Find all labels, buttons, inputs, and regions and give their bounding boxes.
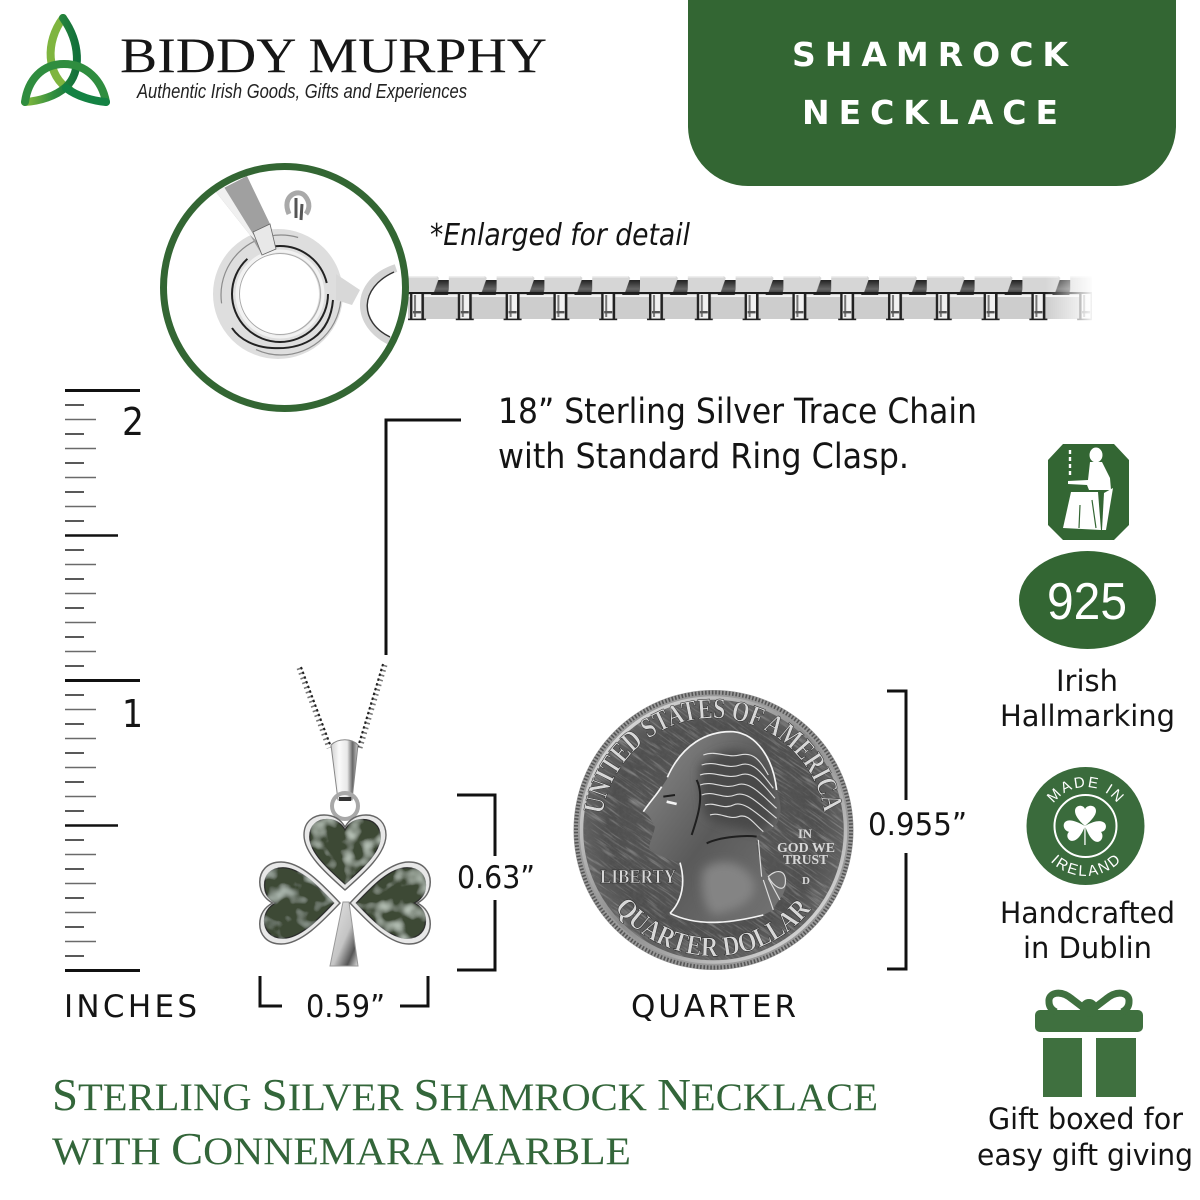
heading: shamrock necklace: SHAMROCK bbox=[792, 35, 1069, 74]
coin lettering: GOD WE bbox=[777, 841, 835, 856]
label: handcrafted in Dublin: Handcrafted bbox=[1000, 896, 1175, 930]
green ring bbox=[164, 166, 406, 408]
logo tagline: Authentic Irish Goods, Gifts and Experiences bbox=[136, 81, 467, 103]
icon: trinity knot bbox=[25, 18, 106, 102]
coin lettering bbox=[584, 698, 842, 957]
icon: 925 oval: 925 bbox=[1047, 573, 1127, 631]
inch ruler: 1 bbox=[122, 692, 143, 736]
dimension: quarter diameter bbox=[868, 691, 967, 969]
dimension: pendant height: 0.63” bbox=[457, 860, 535, 896]
clasp lever bbox=[216, 176, 276, 255]
callout: chain description: with Standard Ring Clasp. bbox=[498, 437, 909, 477]
dimension: pendant width: 0.59” bbox=[306, 989, 385, 1025]
icon: gift box bbox=[1035, 993, 1143, 1097]
label: gift boxed: Gift boxed for bbox=[988, 1102, 1183, 1136]
Washington profile bbox=[643, 732, 786, 922]
dimension: quarter diameter: 0.955” bbox=[868, 807, 967, 843]
coin lettering: UNITED STATES OF AMERICA bbox=[584, 698, 842, 812]
clasp pull loop bbox=[287, 193, 309, 220]
coin lettering: TRUST bbox=[783, 853, 829, 868]
spring ring bbox=[221, 235, 360, 355]
label: irish hallmarking: Hallmarking bbox=[1000, 699, 1175, 733]
label: gift boxed: easy gift giving bbox=[977, 1138, 1193, 1172]
inch ruler bbox=[64, 390, 197, 1025]
clasp detail circle bbox=[164, 166, 406, 408]
coin lettering: D bbox=[802, 875, 810, 887]
icon: 925 oval bbox=[1019, 551, 1156, 649]
callout: chain description: 18” Sterling Silver Trace Chain bbox=[498, 392, 977, 432]
coin lettering: QUARTER DOLLAR bbox=[618, 899, 812, 957]
icon: made in Ireland badge: MADE IN bbox=[1046, 776, 1124, 802]
product title: STERLING SILVER SHAMROCK NECKLACE bbox=[52, 1070, 878, 1120]
shamrock pendant bbox=[260, 664, 430, 966]
heading: shamrock necklace: NECKLACE bbox=[802, 93, 1058, 132]
icon: made in Ireland badge: IRELAND bbox=[1051, 854, 1119, 876]
small ring bbox=[364, 268, 396, 342]
logo: Biddy Murphy bbox=[25, 18, 547, 103]
inch ruler: 2 bbox=[122, 400, 144, 444]
dimension: pendant height bbox=[457, 795, 535, 970]
quarter coin bbox=[574, 690, 854, 970]
coin lettering: LIBERTY bbox=[600, 866, 676, 888]
callout: chain description bbox=[386, 392, 977, 655]
coin lettering: IN bbox=[798, 826, 813, 841]
stem bbox=[330, 902, 358, 966]
necklace chain bbox=[299, 664, 385, 748]
product title: WITH CONNEMARA MARBLE bbox=[52, 1124, 631, 1174]
label: handcrafted in Dublin: in Dublin bbox=[1023, 931, 1152, 965]
chain close-up bbox=[408, 270, 1095, 325]
label: irish hallmarking: Irish bbox=[1056, 664, 1118, 698]
bail bbox=[331, 740, 358, 819]
panel: product name tab bbox=[688, 0, 1176, 186]
icon: assay hallmark bbox=[1048, 444, 1129, 540]
ruler label: INCHES bbox=[64, 989, 197, 1025]
dimension: pendant width bbox=[260, 976, 428, 1025]
icon: made in Ireland badge bbox=[1026, 767, 1144, 885]
label: quarter: QUARTER bbox=[631, 989, 796, 1025]
product title bbox=[52, 1070, 878, 1174]
left heart bbox=[260, 862, 340, 944]
top heart bbox=[304, 815, 386, 890]
logo name: BIDDY MURPHY bbox=[120, 27, 547, 83]
right heart bbox=[350, 862, 430, 944]
note: enlarged for detail: *Enlarged for detail bbox=[430, 218, 691, 253]
